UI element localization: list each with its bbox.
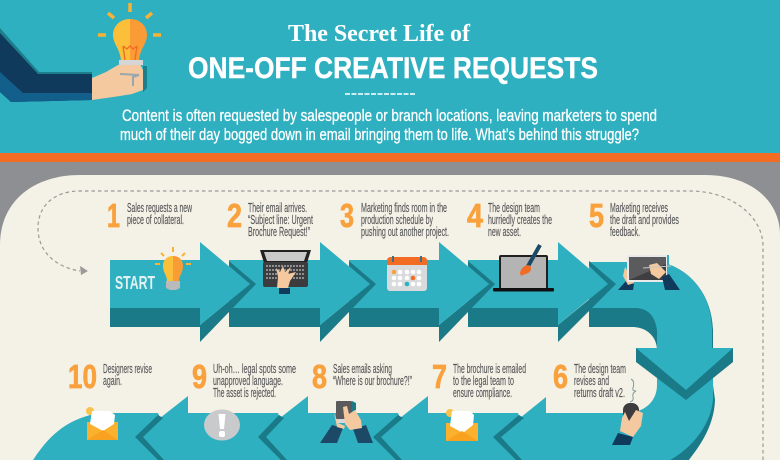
step 10: Designers revise [103, 361, 152, 376]
step 6: revises and [574, 373, 609, 388]
icon: phone with hands [320, 401, 373, 443]
step 10: 10 [68, 358, 97, 395]
step 1 [107, 197, 192, 234]
step 7 [432, 358, 526, 400]
icon: laptop with typing hand [260, 250, 311, 294]
step 3: pushing out another project. [361, 224, 449, 239]
flow arrow: downward head [636, 348, 733, 400]
step 1: piece of collateral. [127, 212, 184, 227]
step 5: feedback. [610, 224, 640, 239]
step 6: 6 [553, 358, 568, 395]
cream panel [0, 175, 780, 460]
step 7: to the legal team to [453, 373, 514, 388]
intro line two: much of their day bogged down in email bringing them to life. What’s behind this struggle? [120, 125, 639, 144]
step 3: 3 [340, 197, 354, 234]
icon: envelope step 7 [446, 409, 478, 441]
icon: tablet with hands [618, 255, 680, 290]
step 3: Marketing finds room in the [361, 200, 447, 215]
step 7: ensure compliance. [453, 385, 512, 400]
step 4: 4 [467, 197, 484, 234]
step 8: 8 [312, 358, 327, 395]
step 8: “Where is our brochure?!” [333, 373, 412, 388]
step 10: again. [103, 373, 122, 388]
step 2: Their email arrives. [248, 200, 307, 215]
step 2: Brochure Request!” [248, 224, 310, 239]
header band [0, 0, 780, 153]
flow arrow: heads [200, 242, 607, 325]
step 4 [467, 197, 552, 239]
icon: calendar [387, 256, 427, 291]
step 7: 7 [432, 358, 447, 395]
icon: envelope step 10 [86, 407, 118, 440]
gray background [0, 162, 780, 460]
step 2 [227, 197, 313, 239]
step 1: Sales requests a new [127, 200, 192, 215]
main title: ONE-OFF CREATIVE REQUESTS [188, 52, 598, 85]
step 6: The design team [574, 361, 626, 376]
step 2: 2 [227, 197, 242, 234]
step 6 [553, 358, 626, 400]
icon: start bulb [155, 247, 191, 290]
step 3: production schedule by [361, 212, 433, 227]
orange divider [0, 153, 780, 162]
step 9: 9 [192, 358, 207, 395]
step 5: Marketing receives [610, 200, 668, 215]
step 4: hurriedly creates the [488, 212, 552, 227]
step 9: Uh-oh… legal spots some [213, 361, 296, 376]
step 5: the draft and provides [610, 212, 679, 227]
dashed route line [38, 191, 763, 460]
flow arrow: head shadows [200, 261, 616, 342]
step 9: unapproved language. [213, 373, 283, 388]
step 9 [192, 358, 296, 400]
step 9: The asset is rejected. [213, 385, 276, 400]
step 4: new asset. [488, 224, 521, 239]
flow arrow: lower row [30, 340, 715, 460]
step 5 [589, 197, 679, 239]
step 5: 5 [589, 197, 604, 234]
step 1: 1 [107, 197, 120, 234]
start label: START [115, 273, 155, 293]
icon: laptop with paint brush [493, 245, 554, 292]
title script line: The Secret Life of [288, 21, 471, 47]
flow arrow: upper row bands [110, 260, 713, 350]
step 10 [68, 358, 152, 395]
icon: hand holding light bulb [0, 3, 161, 102]
step 4: The design team [488, 200, 540, 215]
step 7: The brochure is emailed [453, 361, 526, 376]
step 8 [312, 358, 412, 395]
icon: mouse and hand [612, 379, 643, 445]
icon: warning circle [204, 410, 240, 440]
step 2: “Subject line: Urgent [248, 212, 313, 227]
step 3 [340, 197, 449, 239]
step 8: Sales emails asking [333, 361, 392, 376]
step 6: returns draft v2. [574, 385, 625, 400]
